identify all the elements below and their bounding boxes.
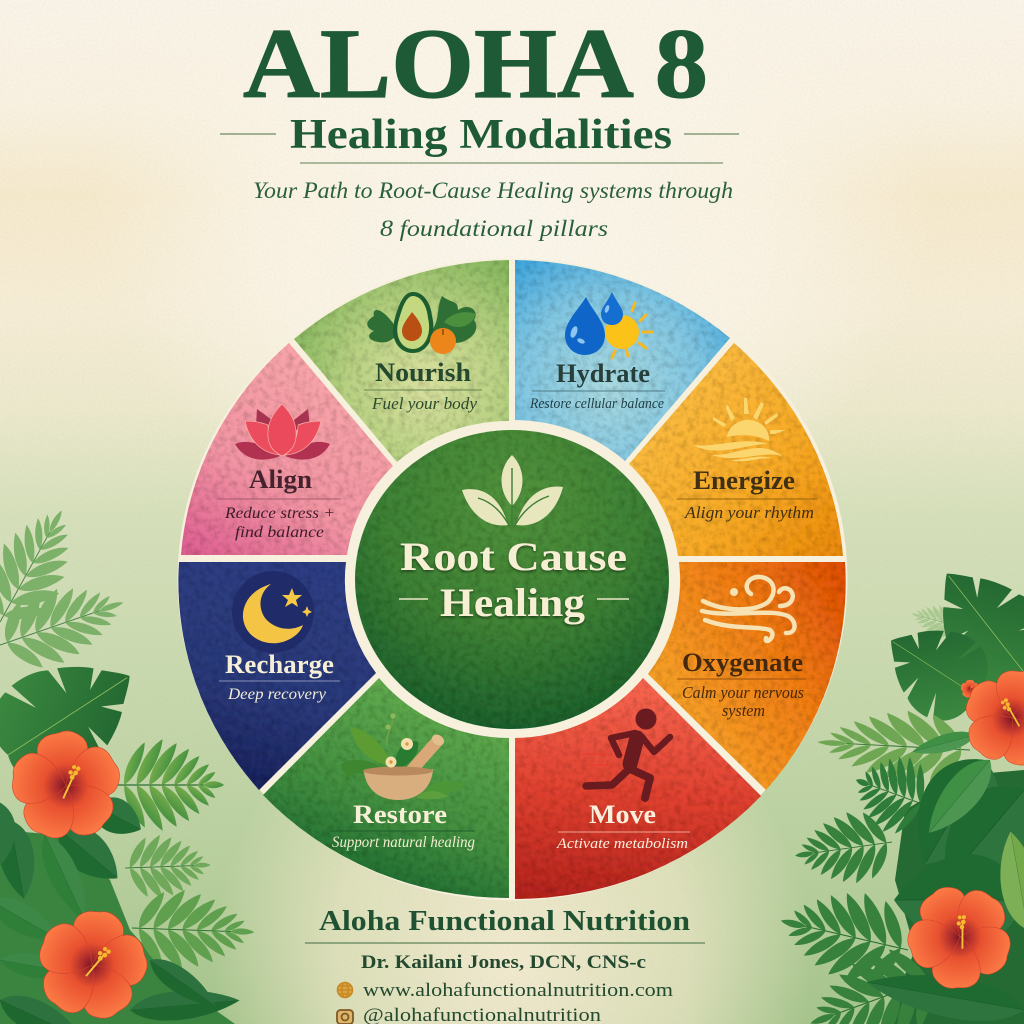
left hibiscus flower, lower (23, 901, 161, 1024)
left hibiscus flower, upper (1, 725, 132, 851)
panel: Energize: Align your rhythm (684, 503, 814, 522)
panel: Oxygenate: Calm your nervous (682, 683, 804, 702)
footer: organisation and contact: Dr. Kailani Jones, DCN, CNS-c (361, 952, 646, 973)
panel: Restore: Restore (353, 800, 447, 829)
title (220, 8, 739, 163)
subtitle: 8 foundational pillars (380, 216, 608, 241)
title: Healing Modalities (290, 112, 672, 158)
panel: Nourish (294, 260, 509, 462)
panel: Recharge: Recharge (225, 650, 334, 679)
icon: sun over waves (692, 398, 786, 461)
panel: Move: Activate metabolism (556, 836, 688, 852)
center hub: Root Cause Healing (355, 430, 669, 729)
icon: runner (584, 708, 670, 798)
left tropical foliage (0, 491, 256, 1024)
panel: Align: Align (249, 465, 313, 494)
icon: mortar, pestle and herbs (340, 713, 466, 800)
panel: Hydrate (515, 260, 730, 461)
right hibiscus flower, upper (944, 648, 1024, 790)
small orange blossom (960, 680, 980, 699)
icon: sprouting leaves (462, 455, 563, 527)
wheel backing (178, 258, 848, 900)
panel: Move: Move (589, 800, 656, 829)
right tropical foliage (770, 542, 1024, 1024)
panel: Recharge (178, 562, 376, 790)
panel: Hydrate: Hydrate (556, 359, 650, 388)
icon: swirling wind (702, 577, 795, 641)
panel: Oxygenate: Oxygenate (682, 648, 803, 677)
panel: Energize (629, 343, 843, 556)
icon: instagram (337, 1010, 353, 1024)
panel: Move (515, 678, 761, 899)
icon: lotus (235, 404, 330, 460)
icon: globe (338, 982, 352, 998)
subtitle (253, 178, 733, 241)
right hibiscus flower, lower (885, 863, 1024, 1014)
panel: Oxygenate (648, 562, 846, 790)
panel: Align: find balance (235, 524, 324, 541)
center hub: Root Cause Healing: Root Cause (400, 534, 627, 579)
footer: organisation and contact (305, 906, 705, 1024)
panel: Align (181, 343, 393, 555)
subtitle: Your Path to Root-Cause Healing systems through (253, 178, 733, 203)
footer: organisation and contact: Aloha Functional Nutrition (319, 906, 690, 937)
icon: avocado and greens (367, 292, 476, 354)
panel: Align: Reduce stress + (224, 505, 335, 522)
panel: Recharge: Deep recovery (227, 686, 327, 703)
panel: Restore: Support natural healing (332, 834, 475, 851)
panel: Hydrate: Restore cellular balance (529, 396, 665, 412)
panel: Energize: Energize (693, 466, 795, 495)
panel: Restore (263, 678, 509, 898)
footer: organisation and contact: www.alohafunctionalnutrition.com (363, 980, 673, 1001)
icon: moon and stars (232, 571, 314, 653)
icon: water drops and sun (565, 292, 652, 358)
center hub: Root Cause Healing: Healing (440, 580, 585, 625)
title: ALOHA 8 (243, 8, 708, 119)
panel: Nourish: Nourish (375, 358, 472, 387)
panel: Nourish: Fuel your body (371, 394, 477, 413)
panel: Oxygenate: system (722, 701, 765, 720)
